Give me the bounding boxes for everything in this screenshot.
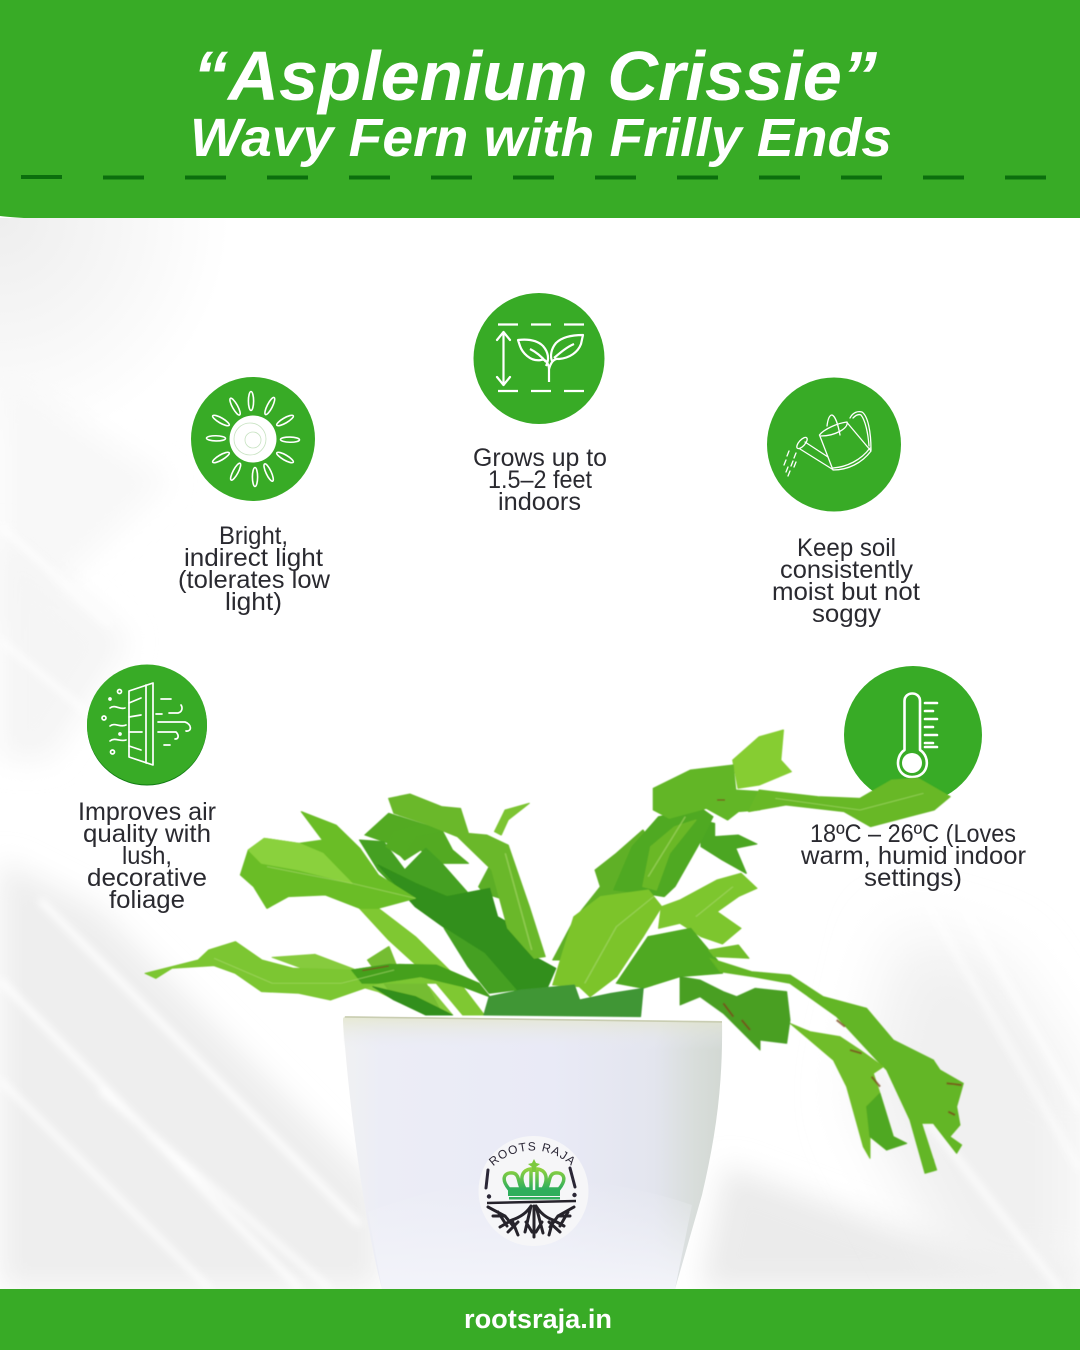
caption: watering: consistently — [780, 556, 913, 584]
big left leaf — [241, 812, 415, 908]
caption: watering: soggy — [812, 600, 882, 628]
horizontal frond — [749, 778, 950, 827]
brown tips — [723, 1003, 962, 1115]
caption: light: light) — [225, 588, 282, 616]
rosette at soil — [484, 985, 643, 1017]
caption: temperature: warm, humid indoor — [800, 842, 1026, 870]
caption: air quality: lush, — [122, 842, 172, 870]
back leaves — [272, 813, 757, 1015]
caption: watering: Keep soil — [797, 534, 896, 562]
caption: temperature: settings) — [864, 864, 962, 892]
long stalk leaf — [360, 908, 484, 1015]
leaf veins and brown tips — [214, 793, 924, 983]
caption: air quality: decorative — [87, 864, 207, 892]
caption: light: (tolerates low — [178, 566, 331, 594]
dark centre leaf — [378, 865, 556, 992]
icon: sun — [191, 377, 315, 501]
caption: temperature: 18ºC – 26ºC (Loves — [810, 820, 1016, 848]
roots — [488, 1206, 574, 1237]
long right frond — [710, 958, 963, 1173]
caption: light: Bright, — [219, 522, 288, 550]
footer band — [0, 1289, 1080, 1350]
caption: air quality: foliage — [109, 886, 185, 914]
caption: height: Grows up to — [473, 444, 607, 472]
footer url: rootsraja.in — [464, 1304, 612, 1334]
caption: air quality: quality with — [83, 820, 211, 848]
title: “Asplenium Crissie” — [193, 37, 877, 115]
pot — [343, 1016, 722, 1289]
hanging frond — [790, 1023, 907, 1158]
right upward leaf — [614, 808, 713, 897]
mid right dark leaf — [616, 928, 722, 988]
caption: light: indirect light — [184, 544, 323, 572]
dashed divider — [21, 175, 1046, 180]
caption: air quality: Improves air — [78, 798, 216, 826]
icon: watering can — [767, 378, 901, 512]
caption: height — [473, 444, 607, 516]
right lobed leaf — [659, 873, 757, 944]
subtitle: Wavy Fern with Frilly Ends — [190, 108, 892, 168]
caption: height: indoors — [498, 488, 581, 516]
icon: plant height — [474, 293, 604, 424]
upper left leaf — [389, 794, 545, 958]
icon: air purifier — [87, 664, 207, 786]
badge wordmark: ROOTS RAJA — [488, 1142, 574, 1166]
caption: height: 1.5–2 feet — [488, 466, 592, 494]
caption: watering: moist but not — [772, 578, 920, 606]
caption: temperature — [800, 820, 1026, 892]
lower right frond — [680, 977, 790, 1050]
bright centre leaf — [553, 890, 661, 997]
caption: watering — [772, 534, 920, 628]
plant: wavy fern — [145, 730, 963, 1173]
caption: air quality — [78, 798, 216, 914]
header band — [0, 0, 1080, 218]
icon: thermometer — [844, 666, 982, 804]
caption: light — [178, 522, 331, 616]
top right leaves — [654, 730, 791, 820]
crown — [504, 1159, 564, 1200]
pot badge: Roots Raja logo — [478, 1136, 588, 1242]
far left frond — [145, 942, 489, 1000]
